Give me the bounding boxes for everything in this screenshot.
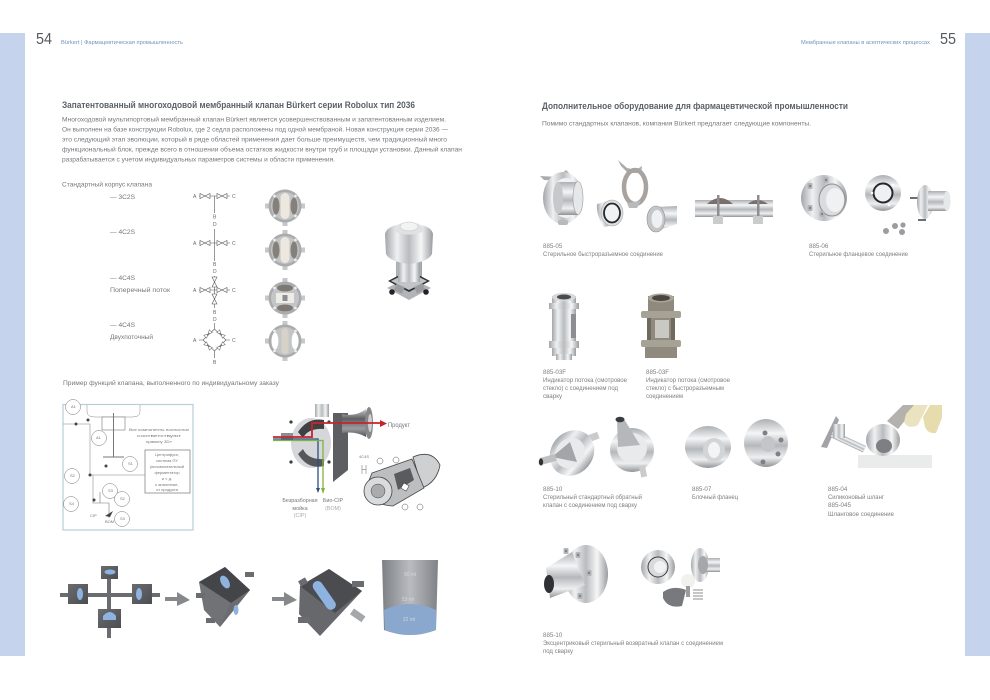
photo: check valve front [539, 421, 604, 485]
P&ID diagram box: (вспомогательный [150, 464, 184, 469]
heading: additional equipment: Дополнительное оборудование для фармацевтической промышленности [542, 101, 848, 112]
caption: 885-04 [828, 486, 895, 518]
flow schematics: B [213, 262, 217, 268]
arrow 1 [165, 592, 190, 606]
page number 54: 54 [36, 31, 52, 48]
photo: clamp open [618, 160, 646, 208]
exploded valve drawing [359, 454, 440, 510]
photo: flange connection assembled [801, 175, 847, 221]
caption: 885-10 eccentric: под сварку [543, 648, 574, 655]
photo: ferrule 2 [647, 206, 677, 232]
intro sentence: Помимо стандартных клапанов, компания Bürkert предлагает следующие компоненты. [542, 120, 811, 128]
page background band: left [0, 33, 25, 656]
P&ID diagram box: A1 [96, 435, 102, 440]
flow schematics: D [213, 317, 217, 323]
P&ID diagram box: от продукта [156, 487, 179, 492]
caption: 885-10 check valve: 885-10 [543, 486, 563, 493]
flow schematics: A [193, 288, 197, 294]
page number 55: 55 [940, 31, 956, 48]
caption: 885-03F welded: 885-03F [543, 369, 566, 376]
render: compact block, top view [298, 569, 365, 636]
flow schematics: D [213, 222, 217, 228]
photo: clamp section view [695, 195, 773, 224]
caption: 885-04: 885-045 [828, 502, 852, 509]
flow schematics: A [193, 338, 197, 344]
P&ID diagram box: S3 [120, 516, 126, 521]
flow schematics [193, 194, 236, 366]
sectional diagram: product flow: (CIP) [294, 513, 306, 519]
intro text block: Он выполнен на базе конструкции Robolux, где 2 седла расположены под одной мембраной. Новая конструкция серии 2036 — [62, 126, 448, 134]
subheading: standard body: Стандартный корпус клапана [62, 180, 152, 188]
tank with fill levels: 96 ml [404, 572, 416, 578]
caption: 885-03F welded: сварку [543, 393, 563, 400]
photo: eccentric valve side [691, 548, 720, 582]
tank with fill levels [382, 560, 438, 635]
render: cross-shaped valve block [60, 566, 160, 638]
caption: 885-05 [543, 243, 664, 258]
subheading: custom example: Пример функций клапана, выполненного по индивидуальному заказу [63, 379, 280, 387]
photo: valve parts [663, 574, 703, 607]
P&ID diagram box: S2 [70, 473, 76, 478]
valve type labels: — 4C4S [110, 275, 136, 282]
sectional diagram: product flow [273, 404, 410, 519]
sectional diagram: product flow: Био-CIP [323, 498, 344, 504]
valve type labels [110, 194, 170, 341]
photo: block flange 2 [744, 419, 788, 467]
valve type labels: Двухпоточный [110, 333, 153, 341]
P&ID diagram box: ферментатор [154, 470, 180, 475]
sectional diagram: product flow: Безразборная [282, 498, 318, 504]
P&ID diagram box: соответствуют [137, 433, 181, 438]
valve type labels: — 4C2S [110, 229, 136, 236]
caption: 885-04: 885-04 [828, 486, 848, 493]
P&ID diagram box: Все компоненты полностью [129, 427, 189, 432]
render: compact block, angled [196, 567, 254, 627]
P&ID diagram box: Центрифуга, [155, 452, 179, 457]
page background band: right [965, 33, 990, 656]
photo: nuts [883, 222, 906, 235]
caption: 885-03F welded: Индикатор потока (смотровое [543, 377, 628, 384]
P&ID diagram box: S1 [128, 461, 134, 466]
P&ID diagram box: CIP [90, 513, 97, 518]
photo: block flange 1 [685, 426, 731, 468]
intro text block: разрабатывается с учетом индивидуальных параметров системы и области применения. [62, 156, 335, 164]
flow schematics: C [232, 241, 236, 247]
round valve bodies [265, 186, 305, 361]
valve type labels: — 4C4S [110, 322, 136, 329]
caption: 885-06: 885-06 [809, 243, 829, 250]
tank with fill levels: 22 ml [403, 617, 415, 623]
running header right: Мембранные клапаны в асептических процессах [801, 40, 931, 46]
photo: check valve angled [610, 417, 654, 477]
caption: 885-03F clamp: 885-03F [646, 369, 669, 376]
exploded valve drawing: 4C4S [359, 454, 369, 459]
flow schematics: A [193, 241, 197, 247]
caption: 885-07 [692, 486, 738, 501]
intro text block [62, 116, 462, 164]
caption: 885-07: Блочный фланец [692, 494, 738, 501]
tank with fill levels: 53 ml [402, 597, 414, 603]
caption: 885-03F welded [543, 369, 628, 400]
caption: 885-10 check valve: клапан с соединением под сварку [543, 502, 638, 509]
photo: eccentric valve flange [641, 550, 675, 584]
caption: 885-04: Шланговое соединение [828, 511, 895, 518]
heading: Robolux valve: Запатентованный многоходовой мембранный клапан Bürkert серии Robolux тип 2036 [62, 100, 415, 111]
flow schematics: C [232, 194, 236, 200]
photo: sight glass welded [549, 293, 579, 360]
running header left: Bürkert | Фармацевтическая промышленность [61, 40, 183, 46]
valve type labels: Поперечный поток [110, 286, 170, 294]
caption: 885-05: Стерильное быстроразъемное соединение [543, 251, 664, 258]
photo: flange side view with studs [910, 185, 950, 221]
flow schematics: A [193, 194, 197, 200]
caption: 885-05: 885-05 [543, 243, 563, 250]
P&ID diagram box: A1 [71, 404, 77, 409]
photo: eccentric check valve assembled [544, 545, 608, 603]
sectional diagram: product flow: (BOM) [325, 506, 341, 512]
intro text block: функциональный блок, прежде всего в отношении объема остатков жидкости внутри труб и площади установки. Данный клапан [62, 146, 462, 154]
P&ID diagram box [63, 400, 193, 530]
caption: 885-06 [809, 243, 909, 258]
product photo: multiport valve [385, 222, 433, 300]
photo: ferrule 1 [597, 200, 623, 227]
photo: clamp connection assembled [540, 170, 583, 225]
P&ID diagram box: правилу 3D» [146, 439, 173, 444]
caption: 885-03F welded: стекло) с соединением под [543, 385, 618, 392]
sectional diagram: product flow: Продукт [388, 422, 410, 429]
photo: sight glass clamp [641, 294, 681, 358]
arrow 2 [272, 592, 297, 606]
flow schematics: D [213, 269, 217, 275]
caption: 885-10 eccentric: Эксцентриковый стерильный возвратный клапан с соединением [543, 640, 723, 647]
caption: 885-04: Силиконовый шланг [828, 494, 885, 501]
caption: 885-03F clamp: стекло) с быстроразъемным [646, 385, 724, 392]
P&ID diagram box: к аналитике, [155, 482, 179, 487]
intro text block: Многоходовой мультипортовый мембранный клапан Bürkert является усовершенствованным и запатентованным изделием. [62, 116, 446, 124]
flow schematics: C [232, 338, 236, 344]
P&ID diagram box: BOM [105, 519, 114, 524]
P&ID diagram box: система ПУ [156, 458, 178, 463]
photo: silicone hoses and fittings [821, 405, 942, 468]
caption: 885-10 check valve: Стерильный стандартный обратный [543, 494, 643, 501]
caption: 885-10 eccentric [543, 632, 723, 655]
flow schematics: B [213, 310, 217, 316]
caption: 885-03F clamp: соединением [646, 393, 683, 400]
flow schematics: B [213, 360, 217, 366]
valve type labels: — 3C2S [110, 194, 136, 201]
caption: 885-03F clamp: Индикатор потока (смотровое [646, 377, 731, 384]
P&ID diagram box: S2 [120, 496, 126, 501]
caption: 885-03F clamp [646, 369, 731, 400]
caption: 885-10 eccentric: 885-10 [543, 632, 563, 639]
caption: 885-07: 885-07 [692, 486, 712, 493]
P&ID diagram box: S4 [69, 501, 75, 506]
photo: flange disc with seal [865, 175, 901, 211]
intro text block: это следующий этап эволюции, который в ряде областей применения дает больше преимуществ, чем традиционный много [62, 136, 447, 144]
flow schematics: B [213, 214, 217, 220]
P&ID diagram box: и т. д. [162, 476, 172, 481]
sectional diagram: product flow: мойка [292, 505, 308, 512]
P&ID diagram box: S3 [108, 488, 114, 493]
caption: 885-10 check valve [543, 486, 643, 509]
flow schematics: C [232, 288, 236, 294]
caption: 885-06: Стерильное фланцевое соединение [809, 251, 909, 258]
